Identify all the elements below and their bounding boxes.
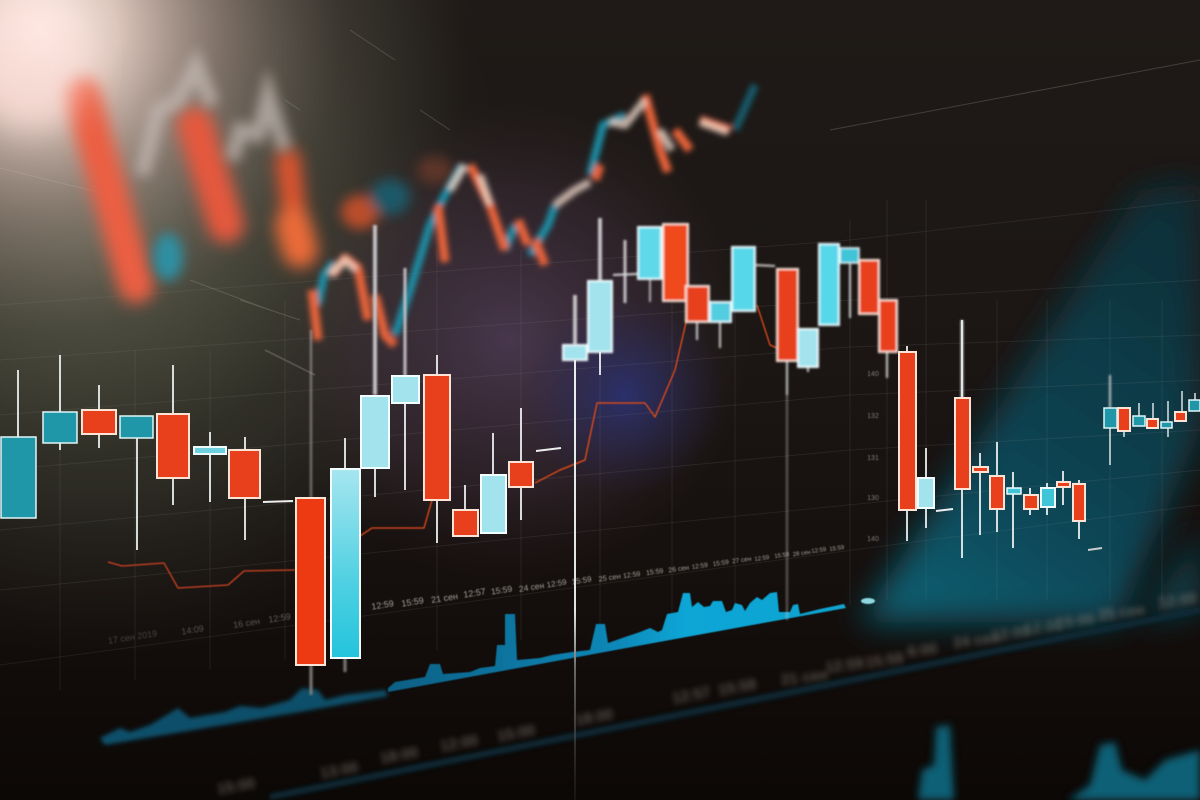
axis date labels: 15:59 (774, 552, 790, 560)
blurred lower axis labels: 12:00 (439, 732, 480, 755)
axis date labels: 15:59 (401, 595, 424, 609)
blue axis strip (270, 610, 1200, 797)
blurred lower axis labels: 13:00 (319, 759, 360, 782)
price axis labels: 140 (867, 371, 879, 378)
axis date labels: 26 сен (668, 565, 690, 574)
axis date labels: 12:59 (623, 571, 641, 580)
axis date labels: 12:59 (268, 611, 291, 625)
axis date labels: 24 сен (518, 580, 545, 594)
axis date labels: 12:59 (371, 598, 394, 612)
blurred lower axis labels: 12:59 (824, 655, 865, 676)
axis date labels: 15:59 (490, 583, 513, 597)
blurred lower axis labels: 18:00 (574, 706, 615, 729)
blurred lower axis labels: 6:00 (907, 640, 938, 661)
candle bodies (1, 437, 36, 518)
axis date labels: 16 сен (232, 616, 261, 630)
scratches (0, 30, 1200, 375)
price axis labels: 130 (867, 495, 879, 502)
axis date labels (107, 545, 845, 646)
candlesticks middle group (563, 224, 897, 620)
price axis labels: 132 (867, 413, 879, 420)
axis date labels: 27 сен (732, 556, 752, 565)
axis date labels: 21 сен (430, 591, 459, 605)
axis date labels: 15:59 (829, 545, 845, 553)
soft background wicks (311, 218, 1110, 498)
blurred lower axis labels: 12:00 (1023, 617, 1064, 638)
volume dot label (861, 598, 875, 604)
blurred lower axis labels: 12:57 (671, 684, 712, 707)
long wick fading down (574, 360, 576, 800)
blurred lower axis labels (216, 590, 1198, 798)
blurred lower axis labels: 15:59 (864, 650, 905, 671)
axis date labels: 14:09 (181, 623, 204, 637)
candlesticks right group (899, 320, 1102, 558)
blurred lower axis labels: 12:00 (1157, 590, 1198, 611)
blurred lower wicks (311, 658, 345, 695)
axis date labels: 12:57 (463, 586, 486, 600)
axis date labels: 17 сен 2019 (107, 628, 158, 646)
axis date labels: 12:59 (811, 547, 827, 555)
blurred lower axis labels: 15:00 (1055, 611, 1096, 632)
blurred lower axis labels: 12:00 (990, 623, 1031, 644)
blurred lower axis labels: 15:00 (216, 775, 257, 798)
blurred lower axis labels: 24 сен (952, 629, 1001, 652)
lens flare top left (0, 0, 90, 130)
axis date labels: 12:59 (754, 555, 770, 563)
axis date labels: 12:59 (691, 562, 709, 571)
axis date labels: 28 сен (793, 550, 811, 558)
blurred pale candles top left (142, 65, 285, 175)
axis date labels: 25 сен (598, 572, 621, 584)
volume bars left blurred (100, 688, 388, 745)
price axis labels: 140 (867, 536, 879, 543)
blurred foreground blue bars bottom right (918, 725, 1200, 800)
axis date labels: 15:59 (646, 568, 664, 577)
volume bars (388, 592, 846, 692)
teal blurred background shape (860, 182, 1200, 622)
axis date labels: 15:59 (571, 574, 593, 587)
blurred colored blobs (153, 156, 453, 281)
blurred red candles top left (82, 95, 300, 285)
blurred lower axis labels: 25 сен (1097, 601, 1146, 624)
axis date labels: 15:59 (712, 559, 730, 568)
blurred lower axis labels: 21 сен (780, 666, 829, 689)
red moving average line (108, 305, 777, 588)
blurred lower axis labels: 15:00 (496, 722, 537, 745)
price axis labels: 131 (867, 455, 879, 462)
grid lines (0, 200, 1200, 690)
axis date labels: 12:59 (546, 577, 568, 590)
blurred lower axis labels: 18:00 (379, 744, 420, 767)
candlesticks far right group (1104, 391, 1200, 465)
candlesticks left group (1, 352, 600, 800)
candle wicks (18, 352, 600, 550)
blurred background price line (312, 85, 755, 345)
price axis labels (867, 371, 879, 543)
blurred lower axis labels: 15:59 (717, 676, 758, 699)
